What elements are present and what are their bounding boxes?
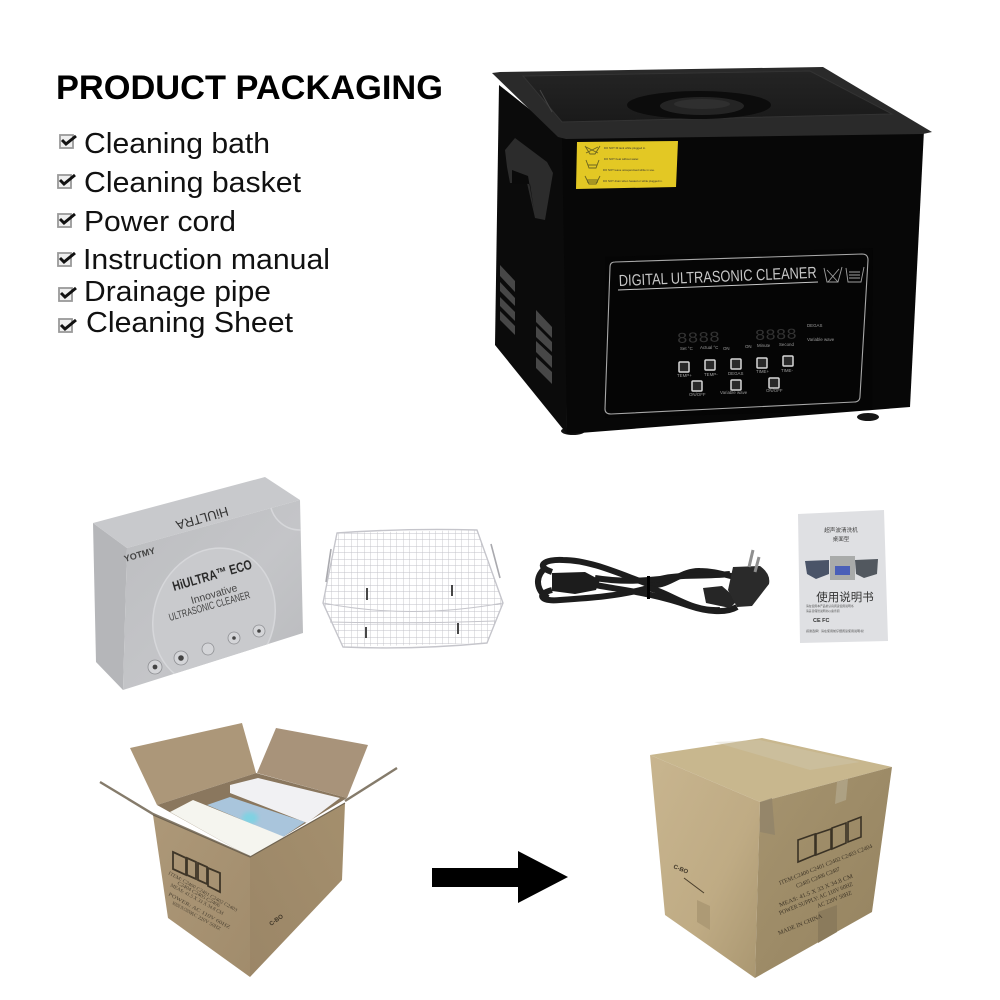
manual fine print: 请在使用本产品前认真阅读使用说明书: [806, 604, 854, 608]
panel labels: ON/OFF: [766, 388, 783, 393]
arrow: [432, 851, 568, 903]
accessory: retail gift box: [93, 477, 303, 690]
gift box brand: YOTMY: [123, 545, 156, 564]
panel labels: DEGAS: [807, 323, 822, 328]
panel heading: DIGITAL ULTRASONIC CLEANER: [618, 265, 817, 290]
displays: 8888: [755, 327, 797, 345]
title: PRODUCT PACKAGING: [56, 69, 443, 107]
warning label: DO NOT fill tank while plugged in.: [604, 146, 646, 150]
panel labels: TEMP-: [704, 372, 718, 377]
gift box front: [123, 500, 303, 690]
displays: 8888: [677, 330, 720, 348]
back foam: [230, 778, 340, 823]
back left flap: [130, 723, 256, 805]
closed box printed specs: C2405 C2406 C2407: [796, 867, 841, 890]
closed box top: [650, 738, 892, 802]
panel buttons: [679, 356, 793, 391]
panel labels: Actual °C: [700, 345, 718, 350]
panel labels: Variable wave: [807, 337, 835, 342]
cleaner side face: [495, 85, 567, 434]
closed box side code: [672, 864, 704, 893]
blue wrapped product: [207, 797, 305, 837]
warning label: [576, 141, 678, 189]
gift box subtitle: Innovative: [190, 582, 239, 607]
open box printed specs: MEAS: 41.5 X 33 X 34.8 CM: [169, 883, 224, 917]
panel labels: TIME-: [781, 368, 793, 373]
cord tie: [647, 576, 650, 599]
back right flap: [257, 728, 368, 798]
panel labels: Variable wave: [720, 390, 748, 395]
open box printed specs: [167, 871, 238, 932]
closed box printed specs: MADE IN CHINA: [778, 913, 824, 937]
side vents: [500, 265, 552, 384]
item: Drainage pipe: Drainage pipe: [84, 276, 271, 308]
cleaner feet: [561, 413, 879, 435]
panel labels: [677, 323, 835, 397]
lid handle: [627, 91, 771, 119]
packing tape: [714, 740, 860, 835]
checklist of package contents: [58, 128, 330, 339]
cord loops: [538, 560, 737, 611]
warning label: DO NOT leave unsupervised while in use.: [603, 168, 655, 172]
gift box top lettering: HiULTRA: [174, 504, 230, 533]
panel labels: TEMP+: [677, 373, 692, 378]
control panel: [605, 248, 873, 418]
basket handles: [326, 544, 500, 582]
manual heading: 桌面型: [833, 535, 850, 543]
panel labels: TIME+: [756, 369, 769, 374]
open box printed specs: POWER: AC 110V 60HZ: [167, 892, 231, 931]
accessory: power cord: [538, 550, 769, 611]
closed box printed specs: [778, 844, 873, 937]
gift box top: [93, 477, 300, 548]
gift box lens decoration: [152, 508, 300, 674]
panel labels: ON/OFF: [689, 392, 706, 397]
right fold flap: [345, 768, 397, 801]
closed box right face: [755, 767, 892, 978]
warning label: DO NOT heat without water.: [604, 157, 639, 161]
closed shipping box: [650, 738, 892, 978]
closed box handling marks: [798, 817, 861, 862]
appliance connector: [552, 572, 600, 594]
open box printed specs: C2404 C2405 C2406: [176, 881, 221, 909]
closed box left face: [650, 755, 760, 978]
plug strain relief: [703, 586, 738, 608]
item: Power cord: Power cord: [84, 206, 236, 238]
manual fine print: 请妥善保管说明书以备查阅: [806, 609, 840, 613]
box right face: [250, 803, 345, 977]
left fold flap: [100, 782, 250, 857]
open box printed specs: ITEM: C2400 C2401 C2402 C2403: [167, 871, 238, 914]
panel labels: Minute: [757, 343, 771, 348]
manual fine print: [806, 604, 866, 633]
item: Cleaning basket: Cleaning basket: [84, 167, 301, 199]
gift box feature icons: [148, 625, 265, 674]
gift box subtitle: [168, 582, 252, 624]
gift box subtitle: ULTRASONIC CLEANER: [168, 589, 252, 624]
box left face: [153, 815, 250, 977]
item: Cleaning bath: Cleaning bath: [84, 128, 270, 160]
displays: [677, 327, 797, 348]
care icons: [824, 267, 864, 282]
plug pins: [749, 550, 759, 572]
cleaner front face: [562, 130, 924, 434]
panel labels: DEGAS: [728, 371, 743, 376]
open box printed specs: MADE IN CHINA: [171, 901, 193, 917]
open shipping box: [100, 723, 397, 977]
side handle: [505, 138, 553, 220]
gift box side: [93, 523, 127, 690]
closed box printed specs: AC 220V 50HZ: [817, 890, 853, 910]
item: Cleaning Sheet: Cleaning Sheet: [86, 307, 293, 339]
closed box printed specs: ITEM:C2400 C2401 C2402 C2403 C2404: [779, 844, 873, 887]
warning label: DO NOT drain when heated or while plugged in.: [603, 179, 663, 183]
panel labels: ON: [745, 344, 752, 349]
manual title: 使用说明书: [816, 590, 874, 604]
panel labels: Set °C: [680, 346, 693, 351]
closed box printed specs: MEAS: 41.5 X 33 X 34.8 CM: [779, 873, 855, 909]
manual fine print: 感谢选择！请在使用前仔细阅读使用说明书！: [806, 628, 866, 633]
front foam: [170, 800, 287, 857]
open box printed specs: AC 220V 50HZ: [189, 911, 221, 932]
plug body: [728, 566, 769, 607]
gift box title: HiULTRA™ ECO: [171, 557, 254, 594]
product: digital ultrasonic cleaner: [492, 67, 932, 435]
accessory: wire cleaning basket: [323, 529, 503, 648]
accessory: instruction manual: [798, 510, 888, 643]
open box handling marks: [173, 852, 220, 892]
open box side code: C-BO: [269, 914, 285, 928]
closed box printed specs: POWER SUPPLY: AC 110V 60HZ: [779, 882, 854, 917]
closed box side code: C-BO: [672, 864, 689, 876]
manual heading: [824, 526, 858, 543]
basket feet: [366, 585, 458, 638]
box interior: [157, 773, 347, 857]
lid: [492, 67, 932, 139]
manual fine print: CE FC: [813, 618, 830, 624]
manual heading: 超声波清洗机: [824, 526, 858, 534]
panel labels: Second: [779, 342, 794, 347]
item: Instruction manual: Instruction manual: [83, 244, 330, 276]
manual product photos: [805, 556, 878, 580]
panel labels: ON: [723, 346, 730, 351]
